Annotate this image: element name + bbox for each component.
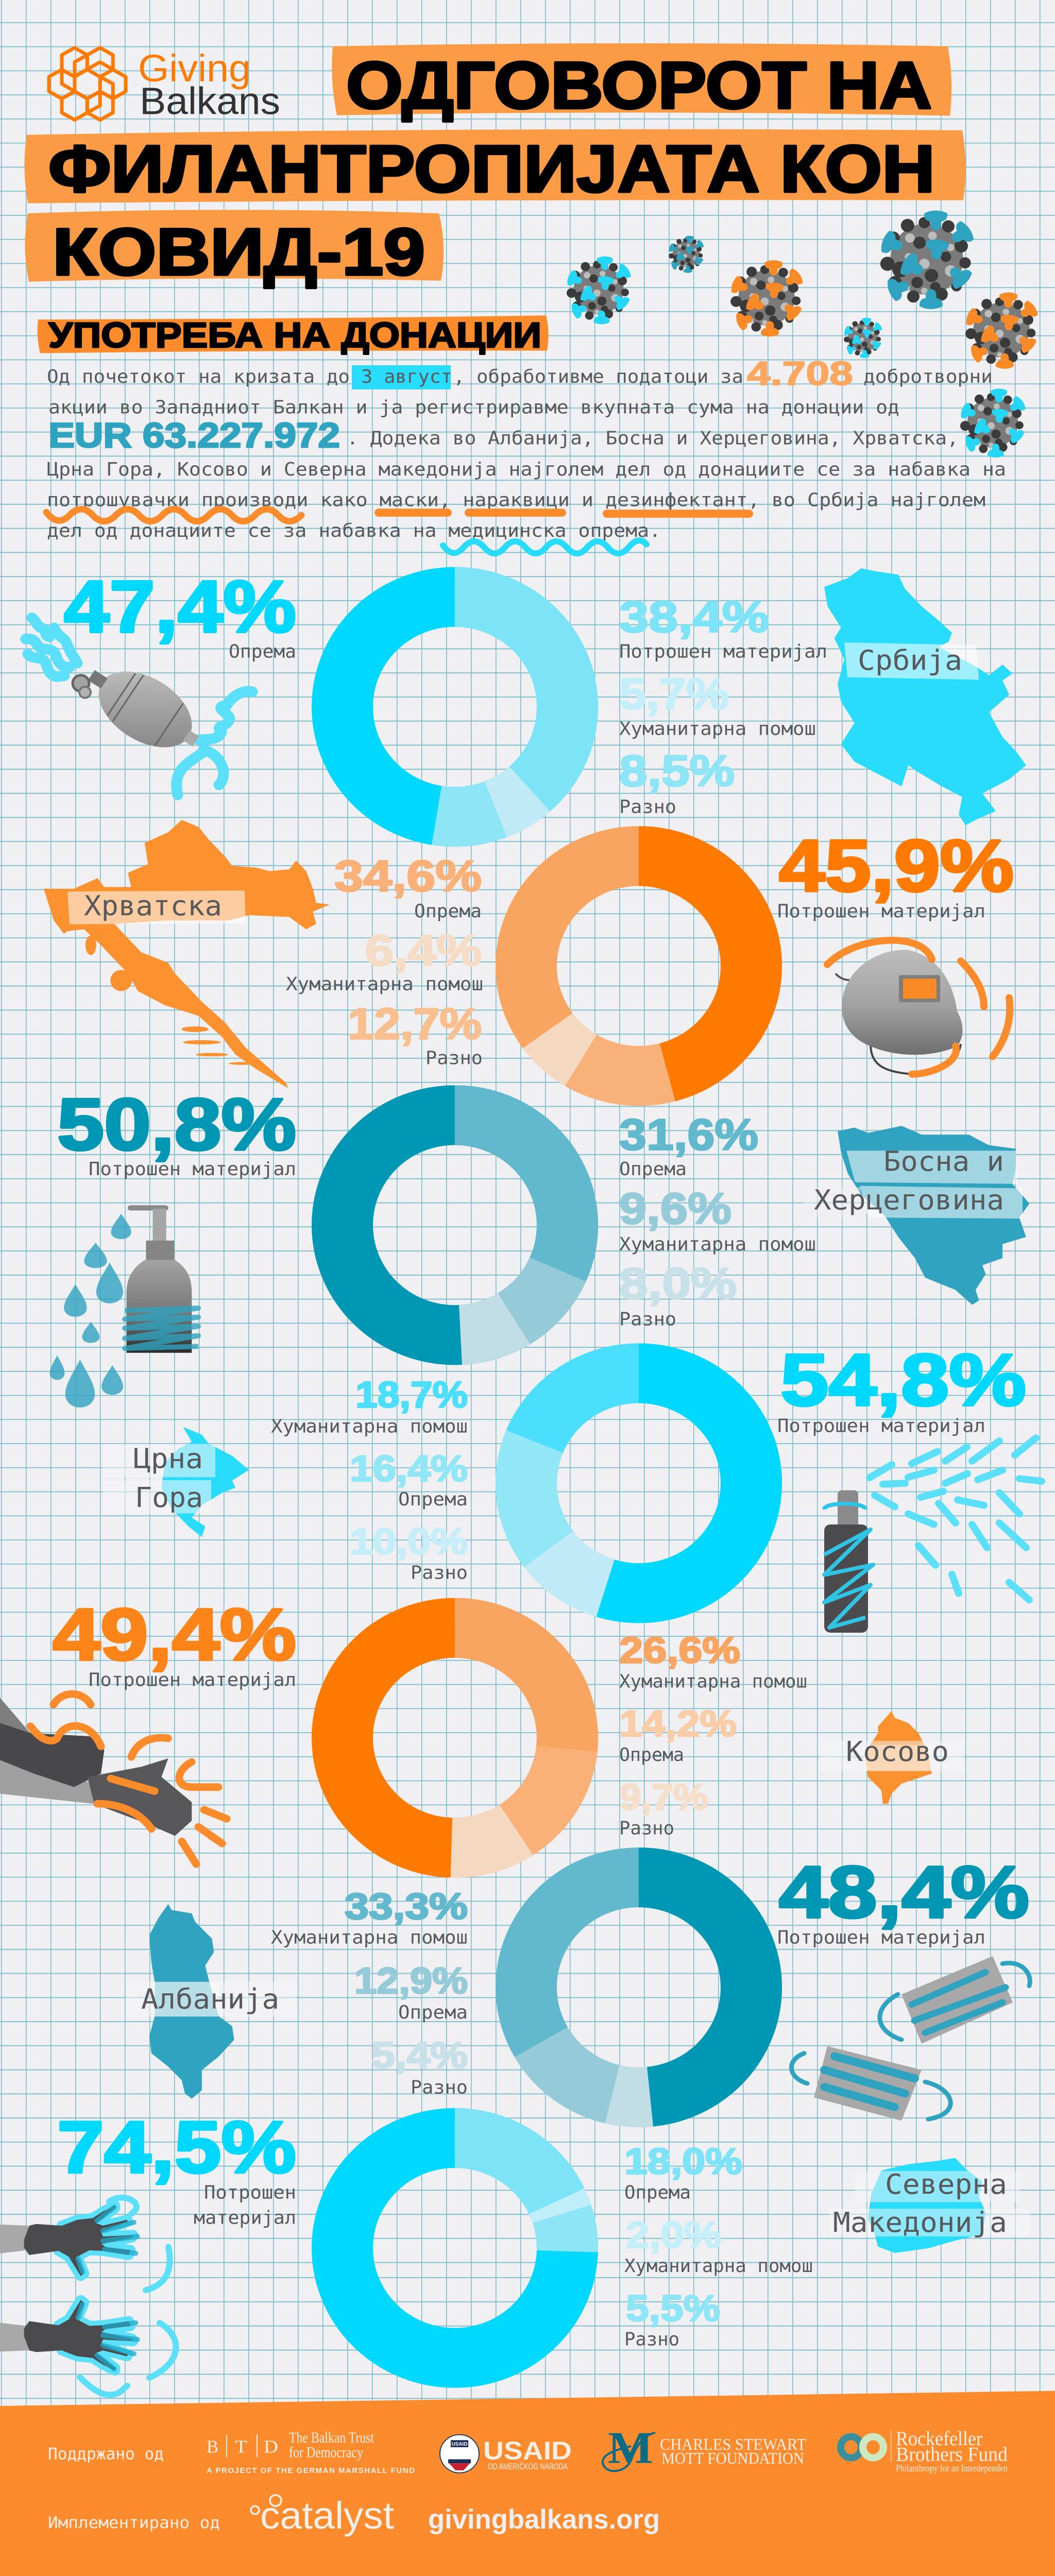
donut chart: North Macedonia (342, 2138, 568, 2358)
intro paragraph: дел од донациите се за набавка на медицинска опрема. (47, 520, 661, 541)
stat: equipment 31,6% (619, 1110, 758, 1180)
logo: Rockefeller Brothers Fund (841, 2428, 1008, 2474)
stat: equipment 14,2%: Опрема (619, 1744, 684, 1766)
map: Albania: Албанија (141, 1983, 279, 2015)
stat: consumables 38,4%: Потрошен материјал (619, 641, 827, 662)
title line 2: ФИЛАНТРОПИЈАТА КОН (48, 131, 935, 206)
logo: Catalyst: catalyst (260, 2494, 394, 2537)
logo: Balkan Trust for Democracy: A PROJECT OF THE GERMAN MARSHALL FUND (207, 2467, 415, 2475)
stat: other 8,5% (619, 747, 735, 818)
map: Kosovo (819, 1711, 963, 1804)
stat: consumables 45,9%: Потрошен материјал (777, 901, 985, 922)
donut chart: Montenegro (526, 1374, 751, 1593)
map: Montenegro (103, 1427, 249, 1537)
stat: other 8,5%: 8,5% (619, 747, 735, 795)
stat: humanitarian aid 33,3% (271, 1886, 468, 1948)
illustration: respirator mask (827, 940, 1010, 1074)
logo: USAID: USAID (483, 2437, 572, 2465)
stat: other 12,7%: Разно (426, 1048, 483, 1069)
stat: other 5,4%: Разно (411, 2077, 468, 2098)
intro paragraph: потрошувачки производи како маски, нараквици и дезинфектант, во Србија најголем (47, 490, 985, 511)
stat: humanitarian aid 5,7% (619, 670, 816, 740)
map: Montenegro: Гора (135, 1481, 203, 1514)
stat: equipment 18,0%: Опрема (624, 2182, 691, 2203)
stat: other 5,5% (624, 2289, 720, 2350)
stat: consumables 48,4%: 48,4% (779, 1851, 1029, 1933)
map: Bosnia and Herzegovina: Босна и (883, 1145, 1004, 1177)
intro paragraph: акции во Западниот Балкан и ја регистриравме вкупната сума на донации од (48, 397, 899, 418)
intro paragraph: . Додека во Албанија, Босна и Херцеговина, Хрватска, (347, 428, 959, 449)
stat: humanitarian aid 2,0%: Хуманитарна помош (624, 2256, 813, 2277)
stat: consumables 38,4% (619, 592, 827, 662)
stat: other 5,4% (371, 2035, 468, 2098)
stat: consumables 74,5%: материјал (194, 2208, 296, 2228)
panel: Croatia (44, 820, 1014, 1088)
map: North Macedonia: Северна (885, 2168, 1007, 2200)
logo: Charles Stewart Mott Foundation: CHARLES STEWART (660, 2435, 806, 2453)
stat: humanitarian aid 18,7% (271, 1375, 468, 1437)
stat: consumables 38,4%: 38,4% (619, 592, 769, 641)
logo: USAID (440, 2435, 572, 2473)
map: North Macedonia: Македонија (833, 2207, 1007, 2239)
stat: equipment 12,9% (354, 1961, 468, 2023)
title bar line 3 (25, 210, 444, 282)
stat: other 12,7%: 12,7% (348, 1000, 482, 1048)
panel: Albania (126, 1851, 1030, 2121)
title (24, 43, 966, 289)
stat: humanitarian aid 26,6%: Хуманитарна помош (619, 1671, 807, 1692)
logo: Balkan Trust for Democracy: The Balkan Trust (289, 2430, 375, 2446)
stat: humanitarian aid 6,4%: 6,4% (365, 926, 482, 975)
map: Serbia (824, 568, 1026, 825)
stat: consumables 50,8%: 50,8% (57, 1083, 296, 1165)
stat: equipment 31,6%: 31,6% (619, 1110, 758, 1159)
title bar line 2 (24, 129, 966, 204)
stat: other 12,7% (348, 1000, 483, 1069)
illustration: gloved hands (0, 1694, 227, 1864)
stat: equipment 12,9%: Опрема (398, 2002, 468, 2023)
donut chart: Kosovo (342, 1628, 568, 1848)
logo wordmark: Balkans (140, 79, 280, 122)
logo: Charles Stewart Mott Foundation (603, 2423, 806, 2473)
map: North Macedonia (829, 2158, 1030, 2253)
stat: other 5,5%: 5,5% (626, 2289, 720, 2329)
donut chart: Albania (526, 1877, 751, 2097)
logo: Rockefeller Brothers Fund: Brothers Fund (896, 2443, 1008, 2465)
stat: humanitarian aid 26,6%: 26,6% (619, 1630, 740, 1671)
stat: equipment 14,2%: 14,2% (619, 1704, 737, 1744)
highlight: date (352, 365, 451, 389)
stat: humanitarian aid 9,6%: Хуманитарна помош (619, 1234, 816, 1255)
footer (0, 2391, 1055, 2576)
stat: equipment 12,9%: 12,9% (354, 1961, 468, 2002)
stat: consumables 49,4%: Потрошен материјал (89, 1670, 296, 1690)
logo: Balkan Trust for Democracy: D (264, 2436, 278, 2457)
stat: equipment 47,4%: 47,4% (64, 565, 296, 648)
panel: Montenegro (103, 1338, 1042, 1633)
map: Bosnia and Herzegovina (804, 1126, 1029, 1305)
map: Croatia: Хрватска (84, 890, 222, 922)
stat: equipment 34,6% (334, 852, 482, 922)
stat: number of actions: 4.708 (747, 355, 853, 392)
stat: consumables 54,8%: 54,8% (780, 1338, 1026, 1421)
panel: North Macedonia (0, 2106, 1030, 2395)
stat: other 8,5%: Разно (619, 797, 676, 818)
stat: other 8,0% (619, 1259, 737, 1330)
panel: Bosnia and Herzegovina (50, 1083, 1029, 1408)
map: Albania (126, 1904, 296, 2099)
website: givingbalkans.org (428, 2505, 660, 2535)
stat: other 5,4%: 5,4% (371, 2035, 468, 2076)
stat: other 9,7% (619, 1777, 708, 1839)
stat: other 8,0%: 8,0% (619, 1259, 737, 1308)
map: Croatia (44, 820, 330, 1088)
icon: interlocking hexagons (49, 48, 126, 120)
logo: Balkan Trust for Democracy (207, 2430, 415, 2475)
stat: humanitarian aid 26,6% (619, 1630, 807, 1692)
stat: consumables 50,8%: Потрошен материјал (89, 1159, 296, 1180)
logo wordmark: Giving (138, 47, 251, 90)
intro paragraph: Од почетокот на кризата до (47, 367, 350, 387)
stat: consumables 48,4%: Потрошен материјал (777, 1927, 985, 1948)
stat: equipment 34,6%: 34,6% (334, 852, 482, 901)
donut chart: Croatia (526, 856, 751, 1076)
logo: Rockefeller Brothers Fund: Philanthropy for an Interdependen (896, 2463, 1008, 2474)
stat: equipment 16,4% (350, 1449, 468, 1510)
donut chart: Bosnia and Herzegovina (342, 1115, 568, 1335)
stat: consumables 74,5% (57, 2106, 296, 2228)
stat: humanitarian aid 33,3%: Хуманитарна помош (271, 1927, 468, 1948)
logo: Charles Stewart Mott Foundation: MOTT FOUNDATION (661, 2450, 804, 2467)
stat: humanitarian aid 9,6%: 9,6% (619, 1184, 731, 1233)
stat: humanitarian aid 2,0% (624, 2215, 813, 2277)
logo wordmark (138, 47, 280, 122)
stat: humanitarian aid 9,6% (619, 1184, 816, 1255)
logo: Rockefeller Brothers Fund: Rockefeller (896, 2428, 982, 2450)
label: supported by: Поддржано од (48, 2445, 164, 2463)
intro paragraph: Црна Гора, Косово и Северна македонија најголем дел од донациите се за набавка на (47, 459, 1006, 480)
illustration: sanitizer bottle (50, 1205, 198, 1408)
logo: Balkan Trust for Democracy: T (235, 2436, 247, 2457)
map: Kosovo: Косово (846, 1736, 949, 1768)
stat: humanitarian aid 6,4%: Хуманитарна помош (286, 974, 483, 995)
logo: Giving Balkans (49, 47, 280, 122)
stat: humanitarian aid 2,0%: 2,0% (626, 2215, 721, 2256)
stat: consumables 45,9%: 45,9% (779, 824, 1014, 907)
logo: Charles Stewart Mott Foundation: M (608, 2423, 653, 2473)
stat: consumables 74,5%: 74,5% (57, 2106, 296, 2188)
stat: equipment 47,4%: Опрема (229, 641, 296, 662)
stat: other 10,0%: Разно (411, 1563, 468, 1583)
title line 3: КОВИД-19 (53, 215, 425, 289)
stat: humanitarian aid 5,7%: 5,7% (619, 670, 729, 719)
underlines (46, 509, 749, 553)
stat: other 10,0% (350, 1521, 468, 1583)
illustration: spray bottle (824, 1438, 1042, 1633)
stat: other 5,5%: Разно (624, 2329, 679, 2350)
map: Montenegro: Црна (133, 1443, 203, 1475)
panel: Kosovo (0, 1593, 963, 1864)
stat: equipment 16,4%: 16,4% (350, 1449, 468, 1489)
title line 1: ОДГОВОРОТ НА (346, 48, 932, 123)
stat: equipment 16,4%: Опрема (398, 1489, 468, 1510)
stat: other 9,7%: 9,7% (619, 1777, 708, 1818)
illustration: surgical masks (791, 1956, 1030, 2121)
stat: humanitarian aid 33,3%: 33,3% (345, 1886, 468, 1927)
stat: humanitarian aid 6,4% (286, 926, 483, 995)
illustration: gloved hands (0, 2198, 176, 2395)
logo: USAID: USAID (451, 2442, 468, 2447)
intro paragraph: , обработивме податоци за (453, 367, 743, 387)
stat: humanitarian aid 5,7%: Хуманитарна помош (619, 719, 816, 740)
stat: equipment 14,2% (619, 1704, 737, 1766)
stat: other 10,0%: 10,0% (350, 1521, 468, 1562)
stat: humanitarian aid 18,7%: 18,7% (355, 1375, 468, 1415)
label: implemented by: Имплементирано од (48, 2514, 220, 2532)
logo: Balkan Trust for Democracy: for Democracy (289, 2445, 363, 2461)
map: Serbia: Србија (858, 644, 962, 676)
illustration: ventilator bag (26, 618, 252, 795)
logo: USAID: OD AMERIČKOG NARODA (488, 2462, 568, 2471)
stat: equipment 18,0% (624, 2141, 742, 2203)
stat: equipment 18,0%: 18,0% (624, 2141, 742, 2182)
stat: total donations: EUR 63.227.972 (48, 416, 340, 455)
section heading: use of donations: УПОТРЕБА НА ДОНАЦИИ (48, 315, 541, 355)
intro paragraph: 3 август (361, 367, 452, 387)
footer background (0, 2391, 1055, 2576)
stat: other 9,7%: Разно (619, 1818, 674, 1839)
intro paragraph (46, 355, 1006, 553)
logo: Balkan Trust for Democracy: B (207, 2436, 218, 2457)
donut chart: Serbia (342, 597, 568, 817)
virus illustrations (566, 210, 1040, 457)
stat: equipment 34,6%: Опрема (414, 901, 482, 922)
panel: Serbia (26, 565, 1026, 825)
intro paragraph: добротворни (863, 367, 993, 387)
title bar line 1 (332, 43, 951, 116)
stat: consumables 74,5%: Потрошен (204, 2182, 296, 2203)
stat: humanitarian aid 18,7%: Хуманитарна помош (271, 1416, 468, 1437)
stat: consumables 54,8%: Потрошен материјал (777, 1416, 985, 1436)
stat: consumables 49,4%: 49,4% (53, 1593, 296, 1675)
stat: equipment 31,6%: Опрема (619, 1159, 687, 1180)
map: Bosnia and Herzegovina: Херцеговина (814, 1184, 1004, 1216)
stat: other 8,0%: Разно (619, 1309, 676, 1330)
